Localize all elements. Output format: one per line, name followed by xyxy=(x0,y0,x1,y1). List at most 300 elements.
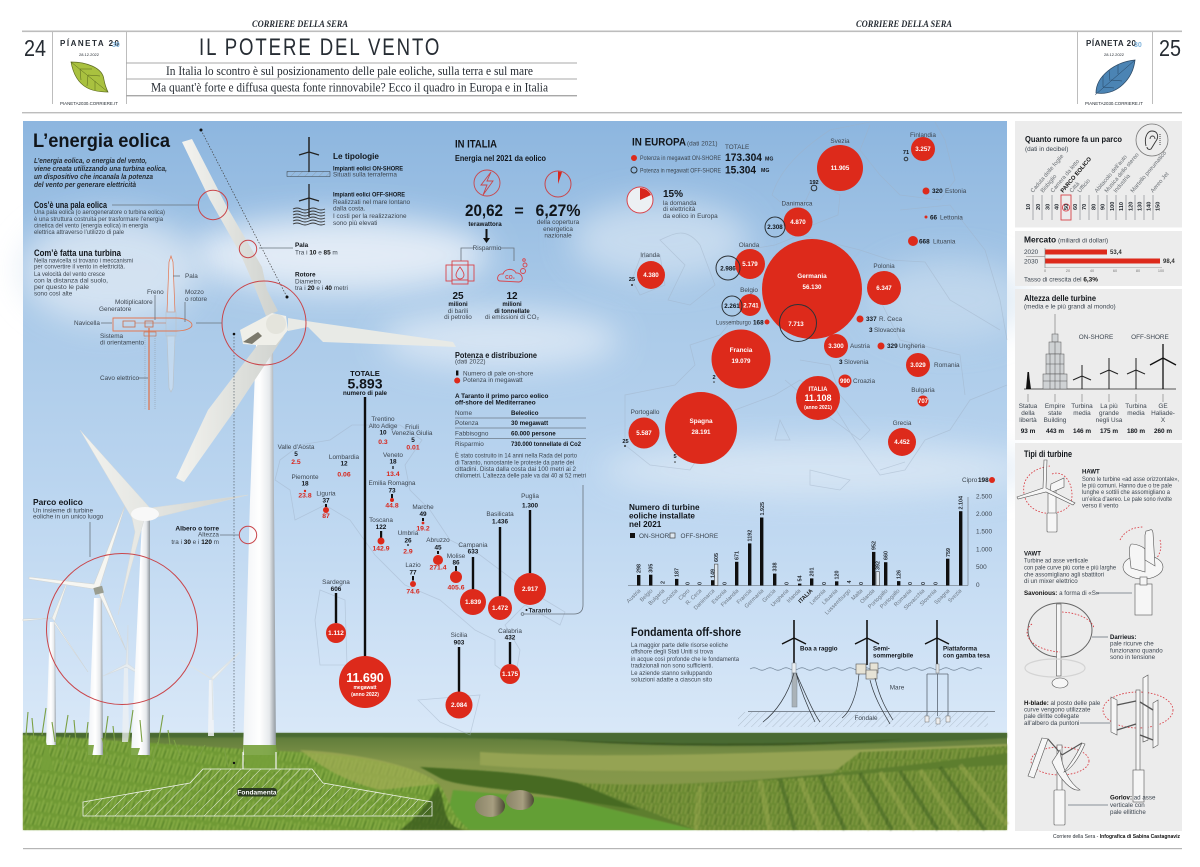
turbine: semi-sommergibile xyxy=(842,620,914,724)
totale pale e megawatt: 11.690 xyxy=(346,671,384,685)
height labels: 175 m xyxy=(1100,428,1118,435)
label: albero o torre: Altezza xyxy=(198,532,219,538)
sidebar panel: altezza delle turbine: (media e le più grandi al mondo) xyxy=(1024,304,1116,310)
noise scale: 10 xyxy=(1026,204,1032,210)
height labels: Turbina xyxy=(1071,403,1093,410)
panel: l'energia eolica xyxy=(33,130,170,298)
region: Valle d'Aosta xyxy=(278,444,315,466)
country labels: Slovacchia xyxy=(874,327,905,334)
region: Sardegna: 1.112 xyxy=(328,630,344,637)
panel: potenza e distribuzione: cittadini. Dista dalla costa dai 100 metri ai 2 xyxy=(455,466,577,473)
region: Sicilia: Sicilia xyxy=(451,632,468,639)
diagram: turbine anatomy: Generatore xyxy=(99,306,132,313)
sidebar panel: tipi di turbine: che assomigliano agli sbattitori xyxy=(1024,572,1104,578)
bar values: 120 xyxy=(834,570,840,580)
noise scale: 30 xyxy=(1046,204,1052,210)
intro text: L’energia eolica, o energia del vento, xyxy=(34,158,147,165)
region: Marche: Marche xyxy=(412,504,434,511)
bubble map: 5.587 xyxy=(636,430,652,437)
credit line: Corriere della Sera - Infografica di Sabina Castagnaviz xyxy=(1053,834,1180,840)
diagram: turbine anatomy: o rotore xyxy=(185,296,207,303)
country labels: Estonia xyxy=(945,188,967,195)
sidebar panel: tipi di turbine: Savonious: a forma di «S» xyxy=(1024,590,1100,597)
region: Friuli Venezia Giulia: 0.01 xyxy=(406,444,420,452)
panel: in Italia: milioni xyxy=(448,302,468,308)
diagram: turbine anatomy: Navicella xyxy=(74,320,100,327)
legend xyxy=(630,533,718,540)
bubble map: 5.179 xyxy=(742,261,758,268)
country axis labels: Svezia xyxy=(947,588,964,604)
chart: market bars: 80 xyxy=(1136,269,1140,273)
country labels: Belgio xyxy=(740,287,758,294)
noise scale labels: Abitacolo dell’auto xyxy=(1094,154,1129,194)
region: Basilicata: 1.472 xyxy=(492,605,508,612)
region: Molise: 405.6 xyxy=(447,584,465,592)
noise scale: 70 xyxy=(1082,204,1088,210)
red circles callouts xyxy=(46,190,306,705)
bubble map: 990 xyxy=(840,379,851,385)
panel: in Italia: di tonnellate xyxy=(494,309,530,315)
height labels: Statua xyxy=(1019,403,1038,410)
sidebar panel: tipi di turbine: pale ellittiche xyxy=(1110,809,1146,816)
chart: market bars: 100 xyxy=(1158,269,1164,273)
icon: lightning xyxy=(474,170,500,196)
bubble map xyxy=(622,132,995,484)
bar values: 0 xyxy=(784,582,790,585)
panel: wheat and corn field xyxy=(23,733,1007,830)
panel: fondamenta off-shore: Fondamenta off-shore xyxy=(631,626,741,639)
section: cos'è una pala eolica xyxy=(34,200,165,236)
country axis labels: Francia xyxy=(736,588,754,606)
country axis labels: Belgio xyxy=(639,588,654,603)
sidebar panel: quanto rumore: (dati in decibel) xyxy=(1025,146,1068,153)
height labels: Haliade- xyxy=(1151,410,1175,417)
heading: L’energia eolica xyxy=(33,130,170,152)
turbine 4 xyxy=(23,572,88,745)
sidebar panel: tipi di turbine xyxy=(1015,443,1182,831)
icon: blue leaf xyxy=(1095,60,1135,95)
blade lower-left xyxy=(176,326,284,482)
height labels: media xyxy=(1127,410,1145,417)
section: cos'è una pala eolica: Cos’è una pala eolica xyxy=(34,200,108,210)
label: Taranto: Taranto xyxy=(528,608,552,614)
savings bracket xyxy=(461,245,514,261)
chart: market bars: 60 xyxy=(1113,269,1117,273)
totale pale e megawatt: (anno 2022) xyxy=(351,692,379,698)
turbine: piattaforma con gamba tesa xyxy=(925,620,990,724)
sidebar panel: mercato: 2020 xyxy=(1024,249,1039,256)
label: parco eolico xyxy=(33,497,104,520)
country axis labels: Spagna xyxy=(934,588,952,606)
region: Trentino Alto Adige: 0.3 xyxy=(378,439,388,446)
noise scale xyxy=(1026,195,1162,220)
main title: IL POTERE DEL VENTO xyxy=(199,32,441,61)
diagram: turbine anatomy: Sistema xyxy=(100,333,124,340)
region: Campania: Campania xyxy=(458,542,488,549)
panel: fondamenta off-shore xyxy=(631,620,995,727)
intro text: viene creata utilizzando una turbina eolica, xyxy=(34,166,167,173)
height labels: 443 m xyxy=(1046,428,1064,435)
noise scale: 150 xyxy=(1156,202,1162,211)
region: Lombardia xyxy=(329,454,360,478)
turbine 6 xyxy=(181,652,240,736)
country axis labels: Olanda xyxy=(859,588,877,605)
panel: in Italia: 25 xyxy=(452,291,464,302)
region: Sardegna xyxy=(322,579,350,643)
country labels: 168 xyxy=(753,320,764,326)
logo: Pianeta 2030 left xyxy=(60,39,120,106)
region: Sicilia xyxy=(446,632,472,718)
sidebar panel: quanto rumore xyxy=(1015,121,1182,228)
country labels: Romania xyxy=(934,362,960,369)
country axis labels: Cipro xyxy=(678,588,691,602)
icon: height turbine 175 m xyxy=(1100,358,1118,389)
subtitle xyxy=(151,64,548,94)
sidebar panel: altezza delle turbine: OFF-SHORE xyxy=(1131,334,1169,341)
bubble map: 6.347 xyxy=(876,285,892,292)
region: Sardegna: Sardegna xyxy=(322,579,350,586)
region: Calabria: 1.175 xyxy=(502,671,518,678)
bubble map: 28.191 xyxy=(692,429,711,436)
sidebar panel: quanto rumore: Quanto rumore fa un parco xyxy=(1025,135,1122,144)
height labels: della xyxy=(1021,410,1035,417)
sidebar panel: tipi di turbine: sono in tensione xyxy=(1110,654,1156,661)
icon: height turbine 146 m xyxy=(1073,365,1091,389)
panel: le tipologie: dalla costa. xyxy=(333,206,366,212)
turbine: boa a raggio: Boa a raggio xyxy=(800,646,838,652)
height labels: La più xyxy=(1100,403,1118,410)
sidebar panel: mercato xyxy=(1015,231,1182,286)
chart: numero di turbine eoliche: Numero di turbine xyxy=(629,503,700,512)
Taranto table: Potenza xyxy=(455,420,479,427)
blade right xyxy=(288,318,456,347)
savings bracket: Risparmio xyxy=(473,245,502,252)
newspaper header xyxy=(22,20,1182,113)
panel: le tipologie xyxy=(287,137,411,227)
diagram: turbine anatomy xyxy=(74,256,207,410)
sidebar panel: tipi di turbine: pale diritte collegate xyxy=(1024,713,1080,720)
chart: 15% pie: di elettricità xyxy=(663,206,696,213)
label: parco eolico: eoliche in un unico luogo xyxy=(33,514,104,520)
height labels: grande xyxy=(1099,410,1119,417)
logo: Pianeta 2030 left: PÍANETA 20 xyxy=(60,39,120,48)
bar values: 0 xyxy=(908,582,914,585)
panel: le tipologie: Le tipologie xyxy=(333,152,379,161)
country axis labels: Malta xyxy=(850,588,865,602)
page number 24: 24 xyxy=(24,35,46,61)
bar values: 952 xyxy=(872,541,878,550)
off-shore rings xyxy=(622,150,909,463)
country axis labels: Ungheria xyxy=(770,588,791,608)
panel: in Italia: terawattora xyxy=(468,221,502,228)
off-shore rings: 5 xyxy=(673,454,677,460)
icon: on-shore turbine xyxy=(287,137,330,176)
panel: in Italia: 6,27% xyxy=(536,201,580,220)
bar values: 201 xyxy=(810,568,816,576)
panel: in Italia: 12 xyxy=(506,291,518,302)
country axis labels: Estonia xyxy=(711,588,729,606)
country axis labels: Slovenia xyxy=(919,588,939,608)
sidebar panel: altezza delle turbine xyxy=(1015,289,1182,440)
bar values: 54 xyxy=(798,576,804,582)
region: Liguria xyxy=(316,490,336,520)
diagram: turbine anatomy: Freno xyxy=(147,289,164,296)
height labels: GE xyxy=(1158,403,1168,410)
sidebar panel: tipi di turbine: VAWT xyxy=(1024,552,1041,558)
bar values: 0 xyxy=(698,582,704,585)
chart: market bars: 98,4 xyxy=(1163,259,1175,265)
region: Calabria: Calabria xyxy=(498,628,522,635)
bubble map: 3.029 xyxy=(910,362,926,369)
region: Lombardia: 12 xyxy=(340,460,348,468)
sidebar panel: tipi di turbine: Sono le turbine «ad asse orizzontale», xyxy=(1082,476,1179,483)
icon: ear xyxy=(1136,124,1168,156)
panel: le tipologie: Impianti eolici OFF-SHORE xyxy=(333,192,405,198)
region: Campania: 1.839 xyxy=(465,599,481,606)
logo: Pianeta 2030 left: 28.12.2022 xyxy=(79,52,100,57)
sidebar panel: tipi di turbine: curve vengono utilizzate xyxy=(1024,706,1091,714)
main panel background: sky xyxy=(20,121,1040,736)
icon: Darrieus turbine xyxy=(1025,603,1108,688)
intro text xyxy=(34,158,167,189)
panel: le tipologie: Realizzati nel mare lontano xyxy=(333,199,411,206)
off-shore rings: 2.308 xyxy=(767,224,783,231)
country labels: Cipro xyxy=(962,477,978,484)
country labels: Olanda xyxy=(739,242,760,249)
panel: in Italia: della copertura xyxy=(537,219,580,226)
country axis labels: Austria xyxy=(626,588,643,605)
axis: 1.000 xyxy=(976,546,992,554)
region: Trentino Alto Adige: Alto Adige xyxy=(369,423,398,430)
country labels: Croazia xyxy=(853,378,875,385)
axis: 2.500 xyxy=(976,494,992,500)
logo: Pianeta 2030 right: 28.12.2022 xyxy=(1104,52,1125,57)
panel: in Italia: di petrolio xyxy=(444,314,472,321)
icon: empire state building xyxy=(1043,314,1067,389)
Taranto table: Fabbisogno xyxy=(455,430,489,438)
panel: in Italia: energetica xyxy=(543,226,573,233)
sidebar panel: tipi di turbine: lunghe e sottili che assomigliano a xyxy=(1082,489,1171,496)
bubble map: 2.741 xyxy=(743,302,759,310)
region: Trentino Alto Adige xyxy=(369,416,398,446)
icon: pie 6.27% xyxy=(545,171,571,197)
panel: potenza e distribuzione: chilometri. L’altezza delle pale va dai 40 ai 52 metri xyxy=(455,472,586,480)
chart: market bars xyxy=(1026,248,1175,273)
regional data on Italy map xyxy=(278,416,583,718)
region: Veneto: 13.4 xyxy=(386,471,400,478)
masthead right: CORRIERE DELLA SERA xyxy=(856,20,952,30)
bubble map: 4.452 xyxy=(894,439,910,446)
label: pala xyxy=(295,242,338,256)
label: pala: Pala xyxy=(295,242,309,249)
region: Basilicata xyxy=(486,511,514,620)
turbine 2 xyxy=(80,430,248,755)
bubble map: ITALIA xyxy=(809,387,828,393)
off-shore rings: 25 xyxy=(629,277,635,283)
totale pale e megawatt xyxy=(339,369,391,708)
Taranto table: Risparmio xyxy=(455,441,484,448)
totale pale e megawatt: 5.893 xyxy=(347,376,383,392)
section: cos'è una pala eolica: cinetica del vento (energia eolica) in energia xyxy=(34,222,149,230)
sidebar panel: tipi di turbine: funzionano quando xyxy=(1110,648,1163,654)
label: pala: Tra i 10 e 85 m xyxy=(295,250,338,256)
country axis labels: Portogallo xyxy=(867,588,889,610)
chart: market bars: 0 xyxy=(1044,269,1046,273)
panel: le tipologie: sono più elevati xyxy=(333,220,377,227)
country labels: Bulgaria xyxy=(911,387,935,394)
bar values: 126 xyxy=(896,570,902,579)
chart: numero di turbine eoliche: nel 2021 xyxy=(629,520,662,529)
country labels: Polonia xyxy=(873,263,895,270)
legend and totals: MG xyxy=(765,156,773,162)
panel: potenza e distribuzione: Potenza e distribuzione xyxy=(455,350,537,360)
country axis labels: Germania xyxy=(744,588,766,610)
country labels: Danimarca xyxy=(782,200,813,208)
country labels: 668 xyxy=(919,238,930,246)
diagram: turbine anatomy: Mozzo xyxy=(185,289,204,296)
height labels: 260 m xyxy=(1154,428,1172,435)
map: Italy outline xyxy=(275,425,565,735)
label: rotore: tra i 20 e i 40 metri xyxy=(295,285,348,292)
noise scale: 60 xyxy=(1073,204,1079,210)
bubble map: 19.079 xyxy=(732,358,751,365)
legend: OFF-SHORE xyxy=(680,533,718,540)
country axis labels: Lituania xyxy=(821,588,840,606)
label: albero o torre: Albero o torre xyxy=(175,526,219,532)
panel: in Italia: di barili xyxy=(448,308,468,315)
sidebar panel: tipi di turbine: un’elica d’aereo. Le pale sono rivolte xyxy=(1082,496,1172,503)
logo: Pianeta 2030 right: PÍANETA 20 xyxy=(1086,39,1137,48)
bar values: 0 xyxy=(859,582,865,585)
intro text: del vento per generare elettricità xyxy=(34,182,136,189)
sidebar panel: mercato: 2030 xyxy=(1024,258,1039,266)
region: Umbria: 2.9 xyxy=(403,548,413,556)
country axis labels: Danimarca xyxy=(693,588,717,612)
label: rotore: Diametro xyxy=(295,278,321,286)
region: Toscana: 122 xyxy=(376,524,387,531)
region: Abruzzo: 271.4 xyxy=(429,564,447,572)
region: Trentino Alto Adige: 10 xyxy=(379,430,387,436)
chart: numero di turbine eoliche xyxy=(626,494,992,616)
panel: in Italia: IN ITALIA xyxy=(455,138,497,150)
turbine 5 xyxy=(103,625,150,742)
bubble map: (anno 2021) xyxy=(804,405,832,411)
region: Valle d'Aosta: 2.5 xyxy=(291,459,301,466)
region: Toscana xyxy=(369,517,393,552)
Taranto table: 60.000 persone xyxy=(511,430,556,438)
region: Friuli Venezia Giulia xyxy=(392,424,433,452)
chart: 15% pie: la domanda xyxy=(663,200,697,207)
region: Abruzzo xyxy=(426,537,450,572)
off-shore rings: 2.261 xyxy=(724,303,740,310)
country labels: Svezia xyxy=(830,138,850,145)
region: Lazio: Lazio xyxy=(405,562,421,569)
region: Lombardia: 0.06 xyxy=(337,472,351,478)
diagram: turbine anatomy: Pala xyxy=(185,273,198,280)
noise scale: 40 xyxy=(1054,204,1060,210)
label: albero o torre xyxy=(171,526,219,546)
region: Veneto xyxy=(383,452,403,478)
country labels: 66 xyxy=(930,214,938,222)
sidebar panel: tipi di turbine: HAWT xyxy=(1082,470,1100,476)
region: Liguria: 37 xyxy=(322,498,330,504)
section: com'è fatta una turbina: sono così alte xyxy=(34,290,73,298)
bar values: 149 xyxy=(710,569,716,578)
panel: in Italia: nazionale xyxy=(544,232,572,240)
country labels: Lituania xyxy=(933,238,956,246)
bubble map: Spagna xyxy=(689,418,713,425)
panel: fondamenta off-shore: Le aziende stanno sviluppando xyxy=(631,670,713,677)
bar values: 4 xyxy=(847,580,853,584)
region: Piemonte: 23.8 xyxy=(298,492,312,500)
noise scale labels: Industria xyxy=(1113,173,1132,194)
region: Lazio xyxy=(405,562,421,596)
off-shore rings: 71 xyxy=(903,150,909,156)
noise scale: 140 xyxy=(1146,202,1152,211)
turbine: semi-sommergibile: sommergibile xyxy=(873,652,914,660)
country labels: 3 xyxy=(839,359,843,366)
panel: fondamenta off-shore: La maggior parte delle risorse eoliche xyxy=(631,642,729,649)
country labels: 337 xyxy=(866,316,877,323)
height labels: Empire xyxy=(1045,403,1066,410)
bar values xyxy=(636,496,964,585)
noise scale: 90 xyxy=(1100,204,1106,210)
bar values: 305 xyxy=(648,564,654,573)
bar values: 605 xyxy=(714,553,720,562)
sea and seabed: Mare xyxy=(890,684,905,692)
region: Umbria xyxy=(398,530,419,556)
noise scale: 110 xyxy=(1119,202,1125,211)
bar values: 1.925 xyxy=(760,502,766,516)
sidebar panel: tipi di turbine: all’albero da puntoni xyxy=(1024,720,1079,727)
region: Lazio: 74.6 xyxy=(406,588,420,596)
off-shore rings: 25 xyxy=(622,439,629,445)
noise scale labels: Caduta delle foglie xyxy=(1030,154,1065,194)
subtitle: In Italia lo scontro è sul posizionamento delle pale eoliche, sulla terra e sul mare xyxy=(166,64,533,78)
off-shore rings: 192 xyxy=(809,180,819,186)
turbine: boa a raggio xyxy=(763,620,838,722)
legend and totals: Potenza in megawatt OFF-SHORE xyxy=(640,168,721,174)
panel: potenza e distribuzione: (dati 2022) xyxy=(455,358,486,366)
chart: market bars: 40 xyxy=(1090,269,1094,273)
icon: oil barrel xyxy=(446,261,474,284)
section: cos'è una pala eolica: è una struttura costruita per trasformare l’energia xyxy=(34,216,164,223)
sidebar panel: tipi di turbine: H-blade: al posto delle pale xyxy=(1024,700,1101,707)
sidebar panel: mercato: (miliardi di dollari) xyxy=(1058,238,1108,244)
region: Veneto: Veneto xyxy=(383,452,403,459)
region: Puglia: 2.917 xyxy=(522,586,538,593)
region: Basilicata: Basilicata xyxy=(486,511,514,518)
region: Sicilia: 903 xyxy=(454,640,465,646)
country axis labels: Finlandia xyxy=(720,588,741,608)
bubble map: 4.380 xyxy=(643,272,659,279)
Taranto table: Nome xyxy=(455,410,472,417)
icon: Savonius turbine xyxy=(1096,527,1163,615)
logo: Pianeta 2030 left: PIANETA2030.CORRIERE.IT xyxy=(60,101,118,106)
bar values: 671 xyxy=(734,551,740,560)
noise scale: 100 xyxy=(1110,202,1116,211)
country labels: Finlandia xyxy=(910,132,936,139)
country axis labels: ITALIA xyxy=(798,588,814,605)
totale pale e megawatt: megawatt xyxy=(353,685,377,691)
region: Toscana: Toscana xyxy=(369,517,393,524)
legend: Numero di pale on-shore xyxy=(463,370,534,378)
panel: in Italia xyxy=(444,138,580,321)
off-shore rings: 2 xyxy=(712,375,716,381)
icon: HAWT turbine xyxy=(1017,460,1075,532)
panel: in Italia: milioni xyxy=(502,302,522,308)
country labels xyxy=(631,132,989,484)
